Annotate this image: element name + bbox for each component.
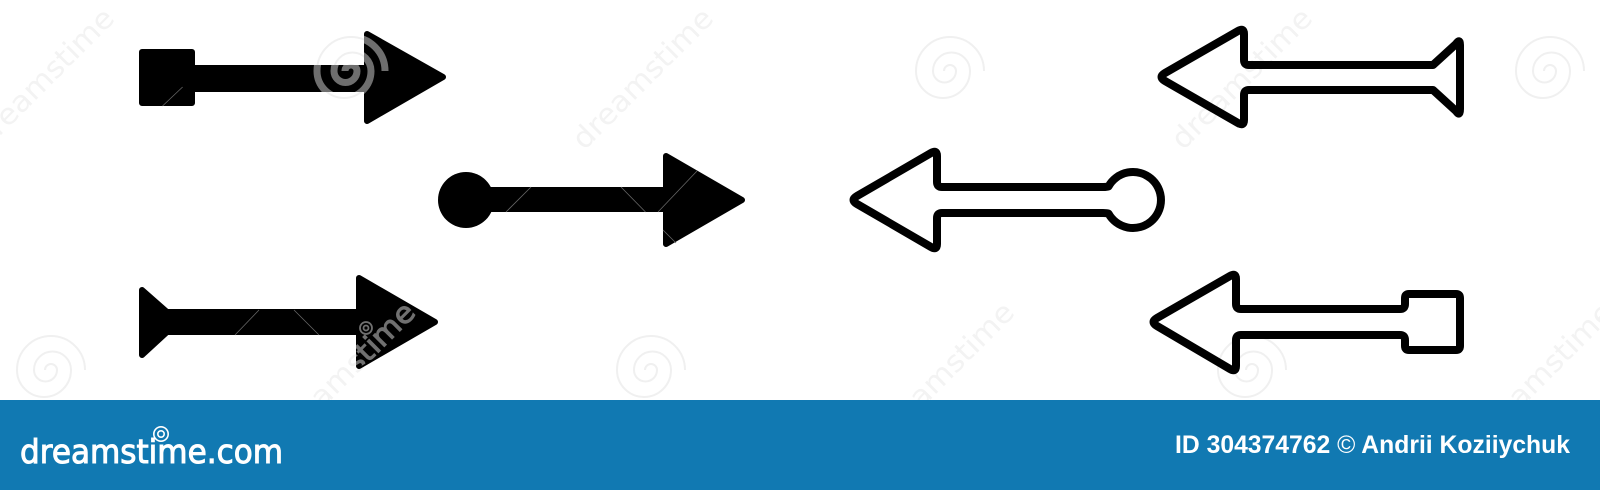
credit text: ID 304374762 © Andrii Koziiychuk <box>1175 431 1570 459</box>
arrow: solid with square tail <box>142 34 443 121</box>
arrow: outlined with square tail <box>1154 275 1460 370</box>
footer bar <box>0 400 1600 490</box>
watermark: spirals <box>17 37 1584 397</box>
watermark: diagonal text: dreamstime <box>565 1 720 156</box>
watermark: diagonal text: dreamstime <box>1164 1 1319 156</box>
arrow: outlined with flared tail <box>1162 30 1460 124</box>
logo: dreamstime.com: dreamstime.com <box>20 432 283 471</box>
arrow: solid with flared tail <box>139 275 438 369</box>
arrow: solid with flared tail: dreamstime <box>267 295 422 450</box>
arrow: outlined with round tail <box>854 152 1161 248</box>
watermark: diagonal text: dreamstime <box>267 295 422 450</box>
watermark: diagonal text: dreamstime <box>866 295 1021 450</box>
arrow: solid with round tail <box>438 156 742 244</box>
